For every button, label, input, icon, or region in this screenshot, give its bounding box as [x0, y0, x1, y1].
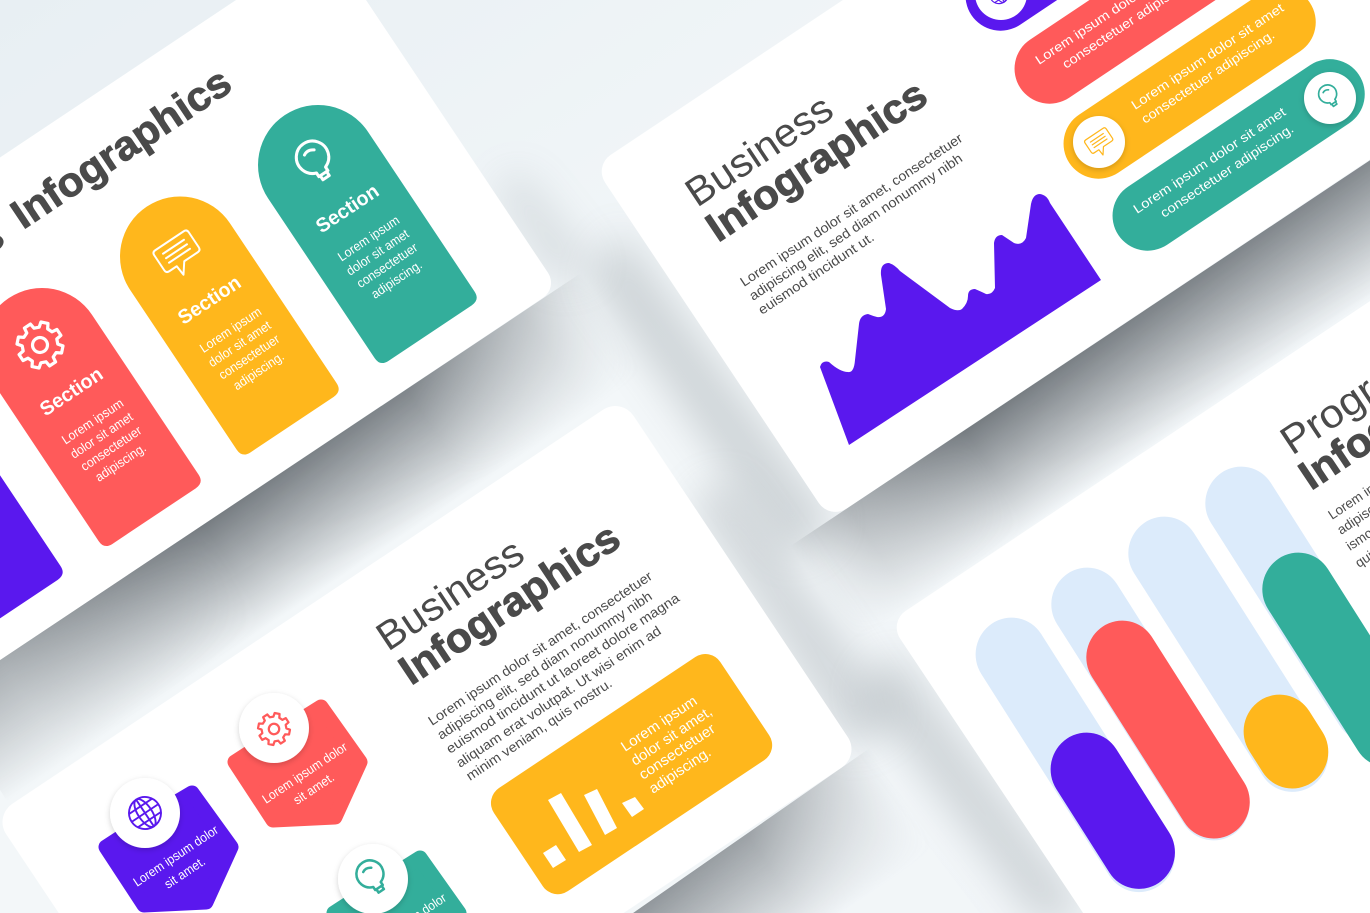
green heading: Section [312, 180, 383, 238]
red heading: Section [36, 363, 107, 421]
callout text: adipiscing. [646, 745, 714, 797]
red body text: Lorem ipsum [59, 395, 126, 447]
yellow pill text [1128, 0, 1287, 126]
yellow pill text: consectetuer adipiscing. [1138, 27, 1277, 126]
bar: red [1073, 607, 1263, 853]
track 2 [1038, 554, 1263, 854]
yellow body text: adipiscing. [230, 348, 287, 393]
green body text: Lorem ipsum [335, 212, 402, 264]
panel: top-left sections card [0, 0, 558, 732]
body text: Lorem ipsum dolor sit amet, consectetuer [737, 130, 966, 289]
green pill text: consectetuer adipiscing. [1157, 121, 1296, 220]
arch: purple section [0, 356, 66, 641]
title: Business: Business [369, 530, 532, 659]
yellow body text: consectetuer [216, 331, 283, 382]
callout: yellow bar-chart box [484, 647, 779, 901]
badge: globe [110, 778, 180, 848]
pill: green [1099, 46, 1370, 264]
yellow heading: Section [174, 272, 245, 329]
track 3 [1115, 503, 1342, 806]
arch: red section [0, 265, 204, 549]
purple hexagon text: Lorem ipsum dolor [130, 822, 222, 889]
title: Business: Business [678, 86, 841, 215]
green body text [335, 212, 425, 302]
hexagon: green [334, 844, 459, 913]
yellow badge [1073, 116, 1125, 168]
green badge [1304, 72, 1356, 124]
yellow pill text: Lorem ipsum dolor sit amet [1128, 0, 1287, 112]
pill: red [1001, 0, 1280, 117]
callout text: Lorem ipsum [618, 693, 700, 755]
panel: top-right area chart card [594, 0, 1370, 520]
red body text: consectetuer [78, 422, 145, 474]
badge: bulb [338, 844, 408, 913]
red body text [59, 395, 149, 485]
icon: bars [543, 789, 644, 868]
bar chart [962, 453, 1370, 906]
red body text: dolor sit amet [67, 409, 136, 461]
pill: purple [952, 0, 1231, 44]
yellow body text: Lorem ipsum [197, 304, 264, 356]
icon: light bulb [1315, 81, 1343, 110]
icon: gear [252, 707, 296, 751]
red body text: adipiscing. [92, 440, 149, 485]
track 4 [1192, 453, 1370, 756]
icon: bulb [351, 855, 392, 898]
body text [1325, 467, 1370, 570]
green body text: adipiscing. [368, 257, 425, 302]
icon: globe [123, 791, 167, 835]
callout text: consectetuer [636, 721, 719, 783]
hexagon: purple [106, 778, 231, 905]
area chart [820, 194, 1101, 445]
body text [425, 568, 683, 783]
icon: globe [986, 0, 1012, 7]
green body text: dolor sit amet [343, 226, 412, 278]
title: Infographics: Infographics [697, 71, 935, 250]
body text: Lorem ipsum dolor sit amet, consectetuer [425, 568, 655, 728]
body text: adipiscing elit, sed diam nonummy nibh [746, 151, 965, 303]
bar: purple [1037, 719, 1189, 903]
badge: gear [239, 693, 309, 763]
pill: yellow [1050, 0, 1329, 192]
red hexagon text: Lorem ipsum dolor [259, 739, 351, 806]
title: Infographics: Infographics [390, 514, 628, 693]
bar: green [1249, 539, 1370, 781]
panel: bottom-left hexagon card [0, 398, 860, 913]
yellow body text [197, 304, 287, 393]
body text: euismod tincidunt ut. [755, 230, 877, 317]
green pill text: Lorem ipsum dolor sit amet [1130, 104, 1289, 216]
arch: green section [235, 82, 480, 366]
body text: aliquam erat volutpat. Ut wisi enim ad [453, 623, 664, 770]
body text: euismod tincidunt ut laoreet dolore magna [443, 590, 683, 756]
track 1 [962, 604, 1189, 906]
icon: chat bubble [152, 229, 207, 282]
title: Infographics (cropped): Infographics [2, 58, 239, 237]
body text: adipiscing elit, sed diam nonummy nibh [434, 588, 655, 742]
hexagon: red [235, 693, 360, 820]
yellow body text: dolor sit amet [205, 317, 274, 370]
callout text [618, 693, 719, 797]
badge: globe [975, 0, 1027, 20]
red hexagon text: sit amet. [290, 769, 337, 807]
icon: light bulb [290, 135, 340, 187]
purple hexagon text: sit amet. [161, 853, 208, 891]
green body text: consectetuer [354, 239, 421, 291]
callout text: dolor sit amet, [628, 704, 715, 769]
bar: yellow [1230, 681, 1342, 802]
arch: yellow section [97, 173, 342, 458]
body text: minim veniam, quis nostru. [463, 676, 615, 783]
panel: bottom-right progress bars card [889, 122, 1370, 913]
icon: gear [8, 313, 72, 377]
icon: chat bubble [1084, 127, 1117, 160]
